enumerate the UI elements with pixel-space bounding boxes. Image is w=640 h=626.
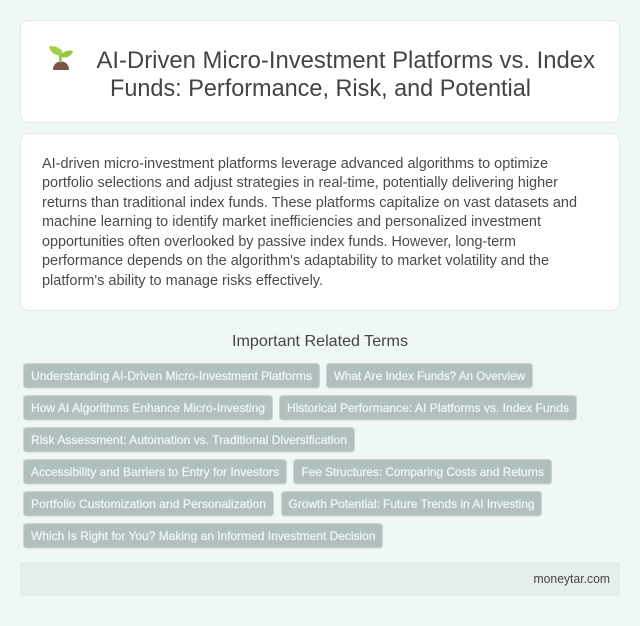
tag: understanding platforms <box>24 364 320 388</box>
tag: customization: Portfolio Customization and Personalization <box>31 497 266 511</box>
tag: accessibility <box>24 460 286 484</box>
panel: header <box>20 20 620 122</box>
tag: right for you: Which Is Right for You? Making an Informed Investment Decision <box>31 529 376 543</box>
tag: historical performance <box>280 396 576 420</box>
tag: customization <box>24 492 274 516</box>
title: Funds: Performance, Risk, and Potential <box>110 75 531 102</box>
text block: summary <box>42 156 577 289</box>
text block: summary: AI-driven micro-investment platforms leverage advanced algorithms to optimize <box>42 156 548 172</box>
tag: right for you <box>24 524 382 548</box>
text block: summary: performance depends on the algorithm's adaptability to market volatility and the <box>42 253 549 269</box>
text block: summary: opportunities often overlooked by passive index funds. However, long-term <box>42 234 516 250</box>
tag: AI algorithms: How AI Algorithms Enhance Micro-Investing <box>31 401 265 415</box>
title <box>96 47 595 102</box>
tag: historical performance: Historical Performance: AI Platforms vs. Index Funds <box>287 401 569 415</box>
panel: summary paragraph <box>20 134 620 310</box>
tag list: related terms <box>24 364 576 548</box>
tag: growth potential <box>282 492 542 516</box>
tag: fee structures <box>294 460 552 484</box>
tag: understanding platforms: Understanding AI-Driven Micro-Investment Platforms <box>31 369 312 383</box>
text block: summary: platform's ability to manage risks effectively. <box>42 273 323 289</box>
tag: index funds overview <box>326 364 532 388</box>
tag: fee structures: Fee Structures: Comparing Costs and Returns <box>302 465 544 479</box>
footer <box>20 562 620 596</box>
tag: AI algorithms <box>24 396 272 420</box>
title: AI-Driven Micro-Investment Platforms vs. Index <box>96 47 595 74</box>
tag: risk assessment <box>24 428 354 452</box>
text block: summary: portfolio selections and adjust strategies in real-time, potentially delivering higher <box>42 175 558 191</box>
tag: risk assessment: Risk Assessment: Automation vs. Traditional Diversification <box>31 433 347 447</box>
text block: summary: machine learning to identify market inefficiencies and personalized investment <box>42 214 541 230</box>
icon: seedling <box>49 46 73 70</box>
heading: related terms: Important Related Terms <box>232 333 408 350</box>
tag: accessibility: Accessibility and Barriers to Entry for Investors <box>31 465 279 479</box>
tag: growth potential: Growth Potential: Future Trends in AI Investing <box>288 497 534 511</box>
footer source text: moneytar.com <box>534 571 610 586</box>
tag: index funds overview: What Are Index Funds? An Overview <box>334 369 525 383</box>
text block: summary: returns than traditional index funds. These platforms capitalize on vast datasets and <box>42 195 577 211</box>
